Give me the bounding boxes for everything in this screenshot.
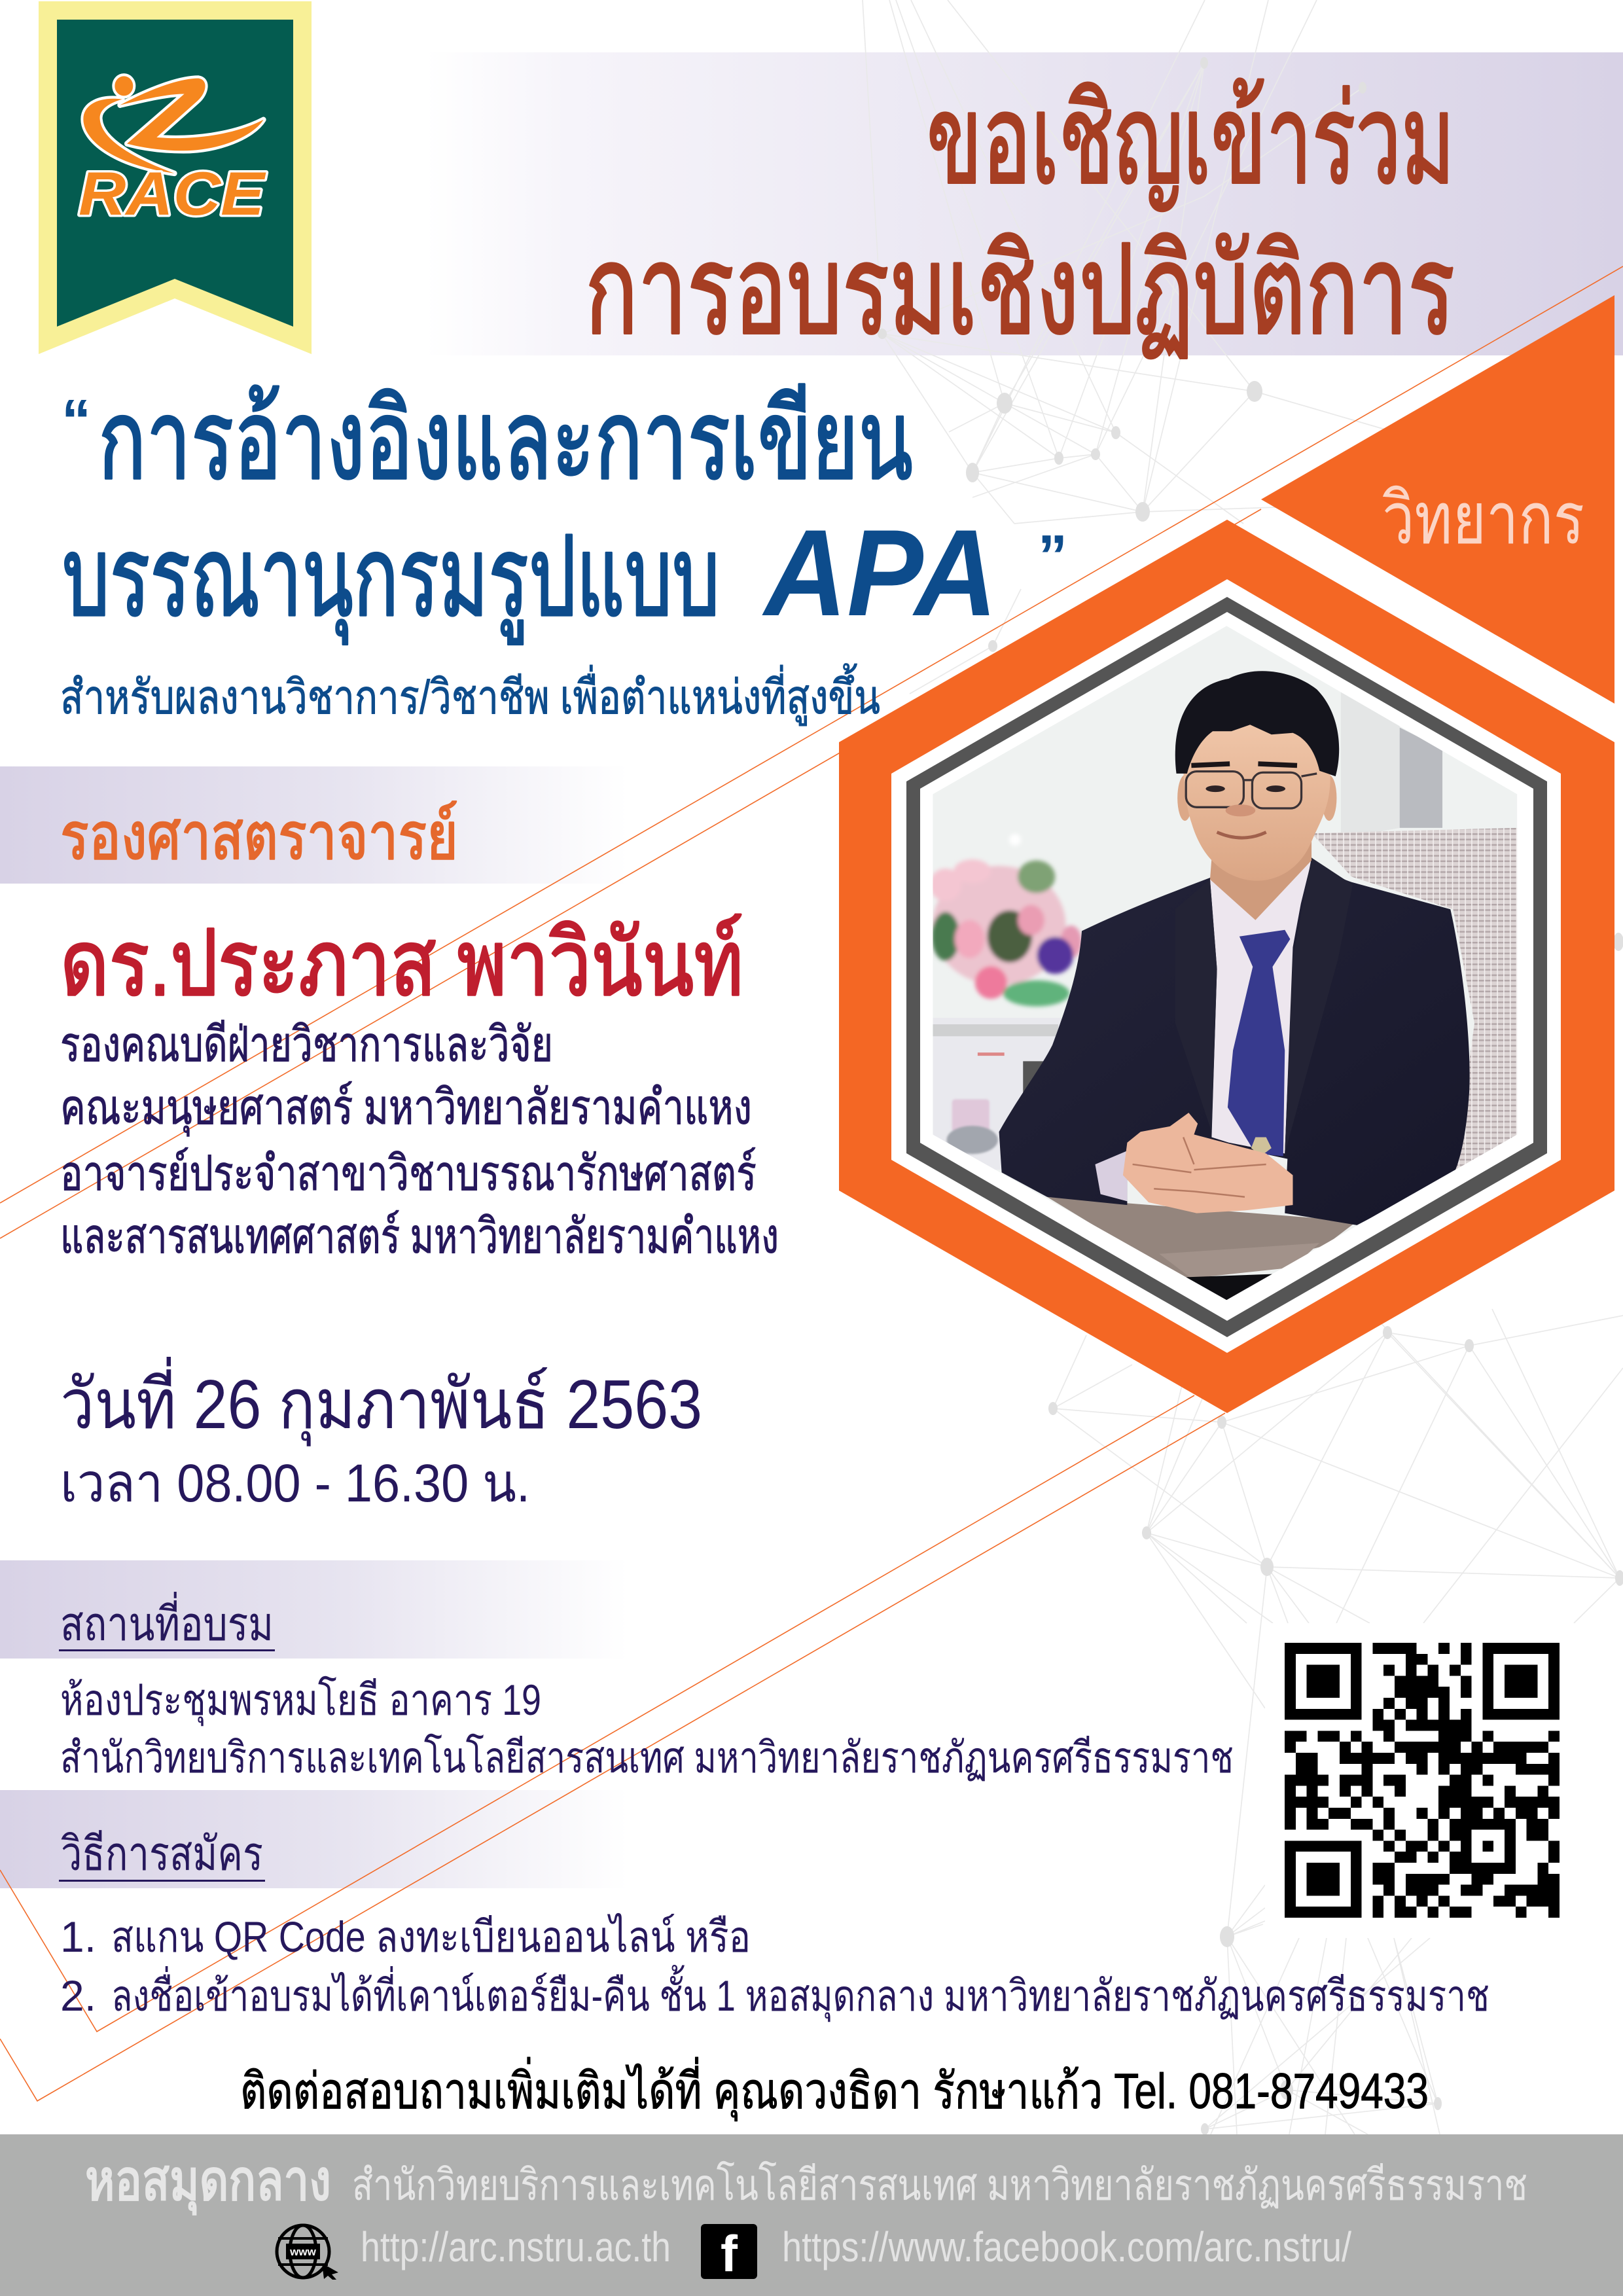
logo text RACE: RACE [79,159,267,228]
shirt [1210,861,1311,1153]
speaker affiliation: คณะมนุษยศาสตร์ มหาวิทยาลัยรามคำแหง [60,1080,752,1137]
network nodes [878,57,1623,2135]
eyes [1205,785,1225,792]
speaker hexagon frame [839,520,1614,1413]
footer facebook url: https://www.facebook.com/arc.nstru/ [782,2223,1351,2270]
icon: facebook: f [721,2225,738,2282]
event time: เวลา 08.00 - 16.30 น. [60,1454,530,1513]
speaker affiliation: และสารสนเทศศาสตร์ มหาวิทยาลัยรามคำแหง [60,1209,779,1263]
panel: speaker rank band [0,766,628,884]
cabinet [933,1018,1066,1170]
course title line 1: การอ้างอิงและการเขียน [98,378,913,503]
venue text: ห้องประชุมพรหมโยธี อาคาร 19 [60,1676,541,1727]
registration heading: วิธีการสมัคร [61,1828,263,1880]
subtitle: สำหรับผลงานวิชาการ/วิชาชีพ เพื่อตำแหน่งที่สูงขึ้น [60,663,880,726]
glasses [1186,772,1317,808]
mouth and nose [1217,832,1266,838]
neck and face [1210,828,1311,920]
QR code [1285,1643,1560,1918]
venue text: สำนักวิทยบริการและเทคโนโลยีสารสนเทศ มหาวิทยาลัยราชภัฏนครศรีธรรมราช [60,1733,1234,1782]
banner green [57,20,293,327]
closing quote: ” [1038,524,1067,589]
orange thin diagonal lines [0,266,1623,2101]
speaker photo [929,622,1520,1306]
banner outer yellow [39,1,312,354]
registration steps: สแกน QR Code ลงทะเบียนออนไลน์ หรือ [111,1912,751,1961]
course title line 2: บรรณานุกรมรูปแบบ [62,515,720,645]
photo background wall [933,622,1520,1306]
shirt cuff [1095,1151,1127,1201]
icon: facebook [701,2224,757,2282]
speaker name: ดร.ประภาส พาวินันท์ [60,912,743,1014]
bottle [952,1099,990,1132]
footer library name: หอสมุดกลาง [85,2149,331,2215]
network background pattern [863,0,1623,2134]
tie [1228,930,1290,1157]
flowers [929,834,1082,1007]
registration steps: 1. [60,1912,96,1961]
eyebrows [1191,764,1297,765]
logo RACE swoosh [83,76,264,173]
table [1047,1197,1357,1281]
speaker affiliation: รองคณบดีฝ่ายวิชาการและวิจัย [60,1017,553,1071]
event date: วันที่ 26 กุมภาพันธ์ 2563 [60,1357,702,1446]
banner with RACE logo [39,1,312,354]
speaker rank: รองศาสตราจารย์ [60,800,458,873]
opening quote: “ [62,388,91,454]
venue heading: สถานที่อบรม [60,1592,274,1651]
registration steps: 2. [60,1971,96,2020]
footer website: http://arc.nstru.ac.th [361,2223,671,2270]
white box behind QR code [1265,1623,1623,1938]
panel: registration band [0,1790,628,1888]
hands [1123,1113,1293,1213]
venue text [60,1676,1234,1782]
icon: www globe with cursor [277,2225,338,2280]
registration steps [60,1912,1489,2022]
footer band [0,2134,1623,2296]
speaker triangle [1261,295,1614,704]
speaker affiliation [60,1017,779,1263]
panel: venue band [0,1560,628,1659]
hair [1175,671,1339,776]
jacket lapels [1210,880,1217,1128]
speaker affiliation: อาจารย์ประจำสาขาวิชาบรรณารักษศาสตร์ [60,1146,757,1200]
course title APA: APA [762,504,997,641]
panel: title band [425,52,1623,355]
ears [1177,775,1192,821]
suit [999,855,1470,1225]
icon: www globe with cursor: www [289,2246,317,2258]
office chair [1311,828,1517,1181]
